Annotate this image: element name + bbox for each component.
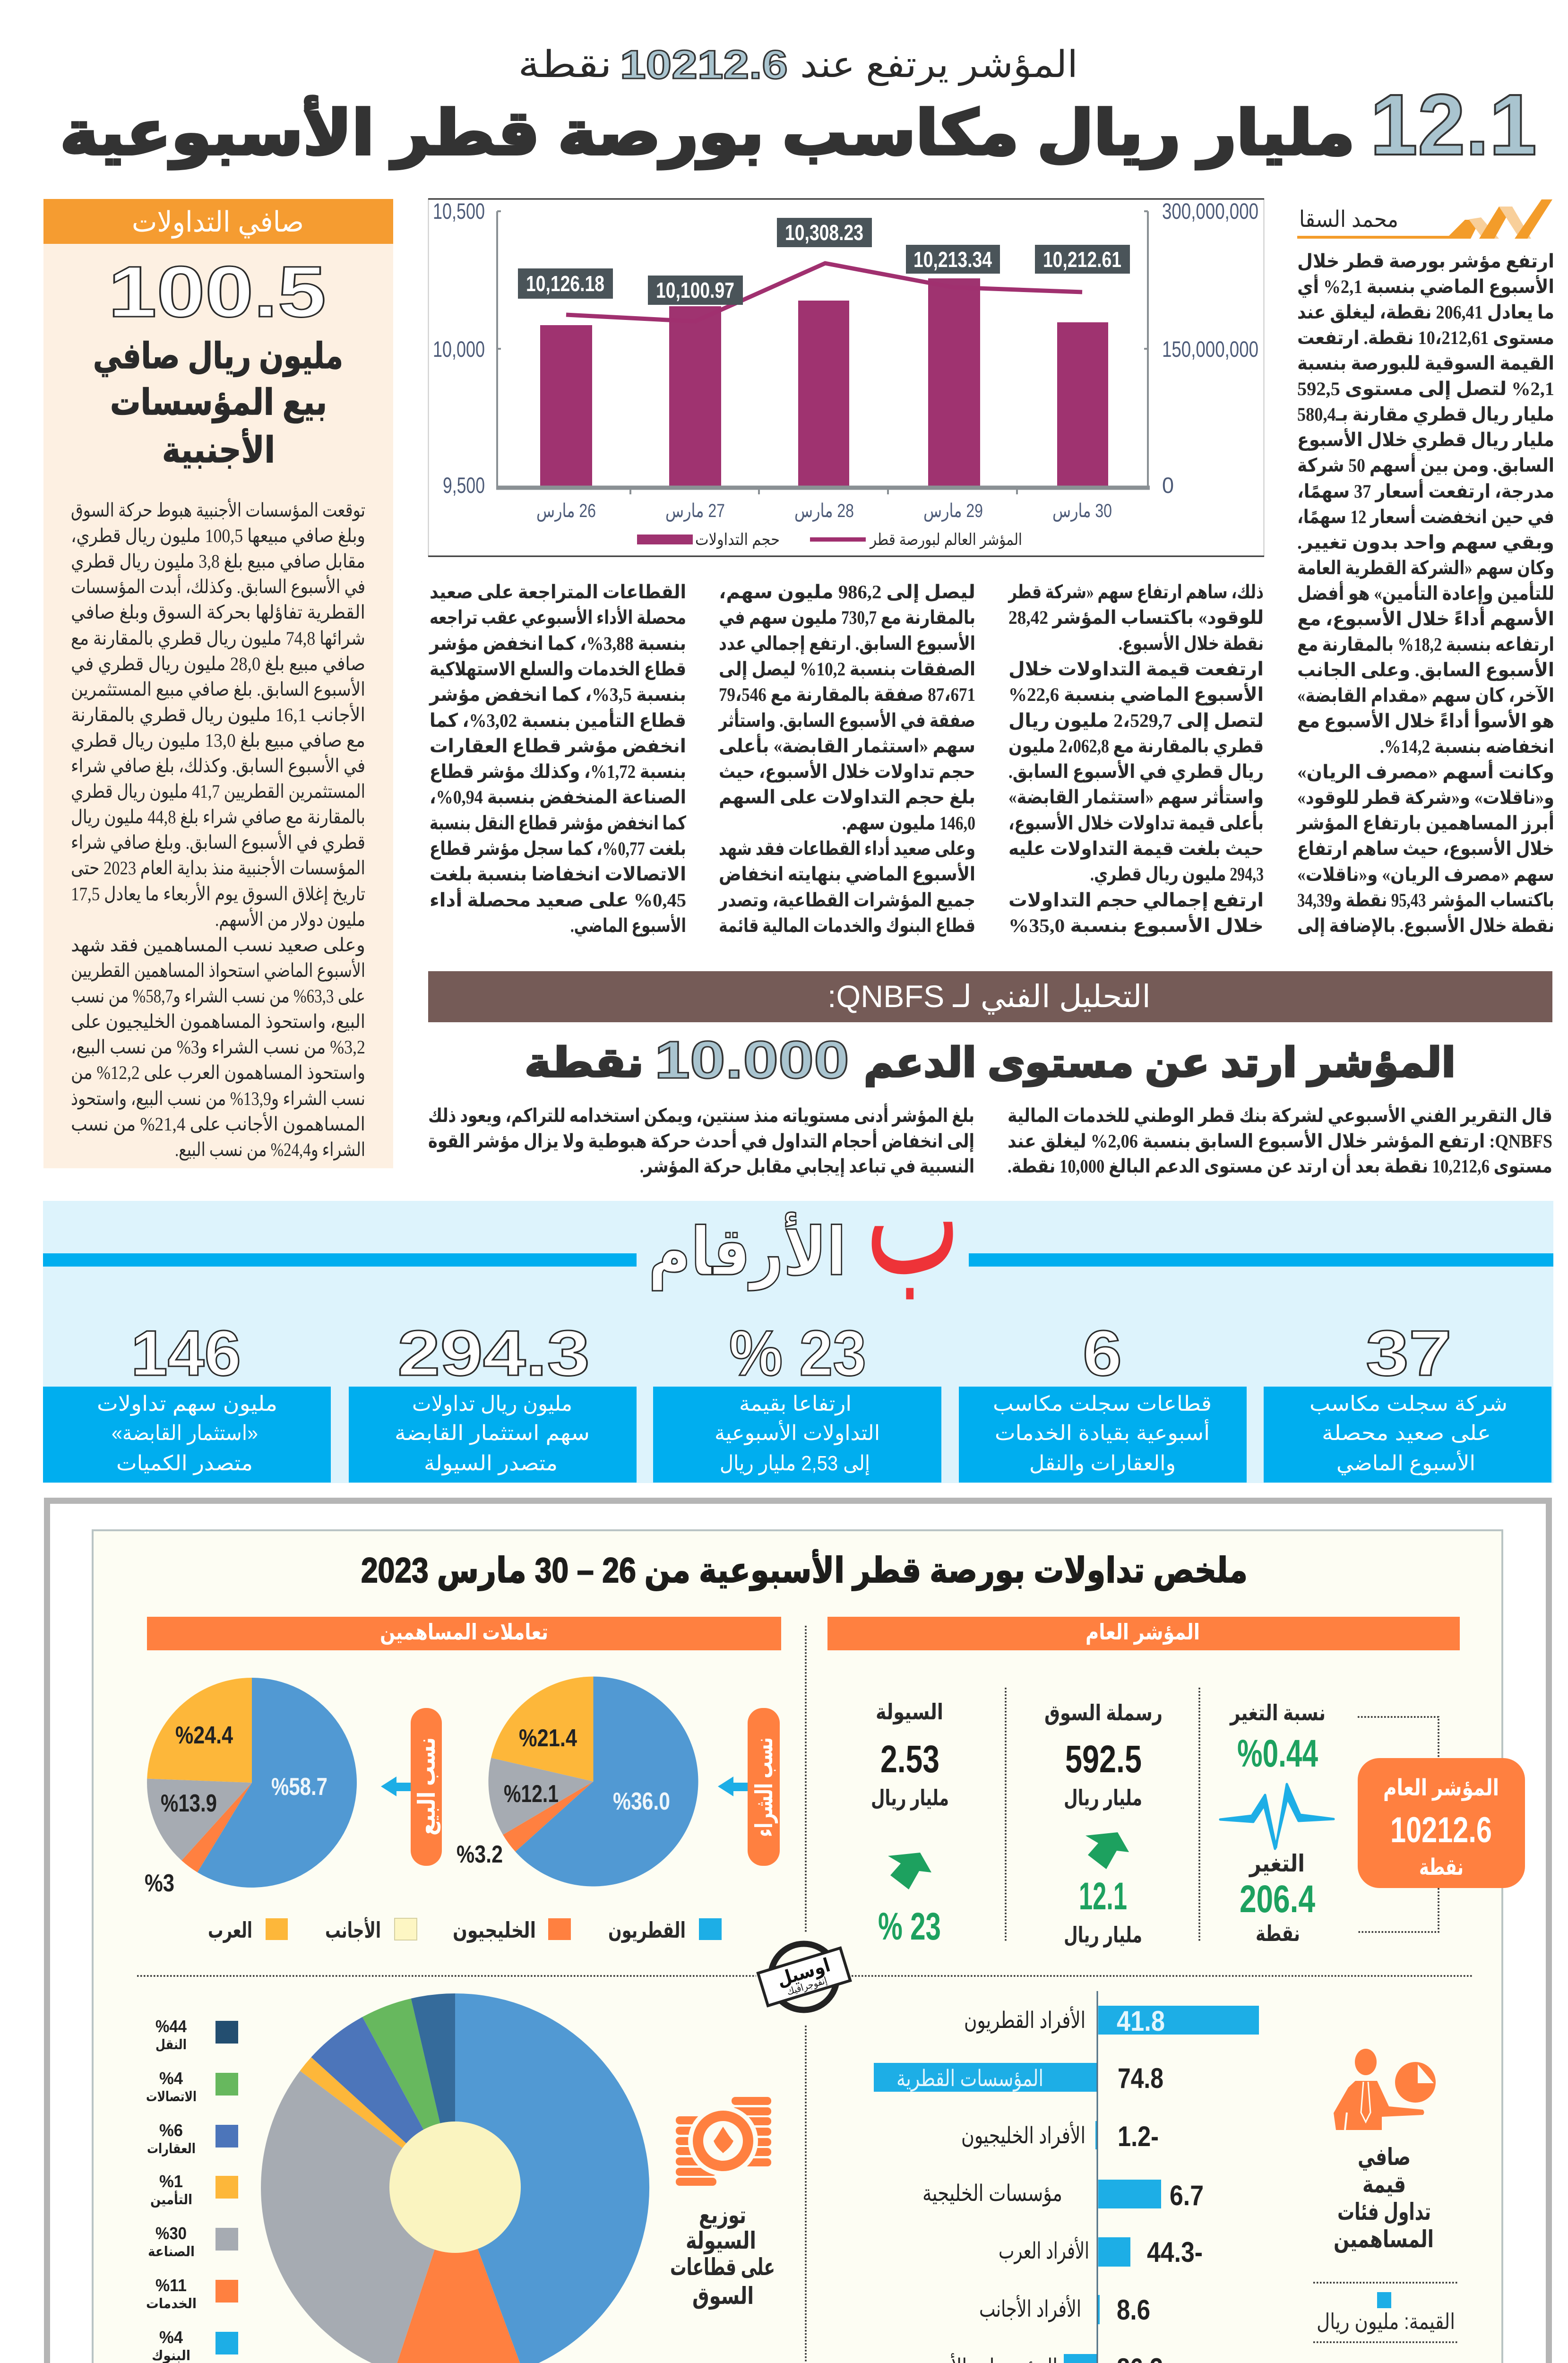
bar legend: value unit xyxy=(1317,2292,1455,2335)
bar chart: net trading by investor group xyxy=(874,1991,1259,2363)
technical analysis text left xyxy=(428,1103,974,1177)
stat: market cap: مليار ريال xyxy=(1064,1923,1142,1948)
chart: index and trading volume: 10,212.61 xyxy=(1043,247,1121,272)
article column 4: القطاعات المتراجعة على صعيد xyxy=(430,581,686,603)
pie chart: buy ratios: %21.4 xyxy=(519,1725,577,1752)
bar chart: net trading by investor group: 8.6 xyxy=(1117,2294,1150,2326)
bar chart: net trading by investor group: 74.8 xyxy=(1118,2062,1163,2094)
article column 4: الاتصالات انخفاضا بنسبة بلغت xyxy=(430,863,686,885)
subtitle xyxy=(518,43,1078,87)
pie chart: sell ratios: %24.4 xyxy=(175,1722,233,1749)
stat: liquidity: مليار ريال xyxy=(871,1785,949,1811)
pie legend xyxy=(208,1917,722,1943)
article column 3: 146,0 مليون سهم. xyxy=(842,812,975,834)
article column 3: صفقة في الأسبوع السابق. واستأثر xyxy=(718,708,975,732)
sidebar article text: وعلى صعيد نسب المساهمين فقد شهد xyxy=(71,934,365,956)
bar chart: net trading by investor group: الأفراد الخليجيون xyxy=(961,2121,1086,2149)
header: shareholder transactions xyxy=(147,1617,781,1650)
main headline xyxy=(60,76,1537,173)
article column 1: وبقي سهم واحد بدون تغيير. xyxy=(1297,532,1554,553)
sidebar article text: المساهمون الأجانب على 21,4% من نسب xyxy=(71,1112,365,1135)
sidebar article text: نسب الشراء و13,9% من نسب البيع، واستحوذ xyxy=(71,1088,365,1110)
article column 2: بأعلى قيمة تداولات خلال الأسبوع، xyxy=(1008,811,1264,834)
stat box: 23 percent: إلى 2,53 مليار ريال xyxy=(720,1452,870,1475)
sidebar article text: بالمقارنة مع صافي شراء بلغ 44,8 مليون ريال xyxy=(71,806,365,828)
donut legend: التأمين xyxy=(150,2191,192,2208)
main headline: 12.1 xyxy=(1370,76,1537,173)
sidebar article text: الأجانب 16,1 مليون ريال قطري بالمقارنة xyxy=(71,703,365,726)
pie legend: الخليجيون xyxy=(453,1918,536,1943)
date labels: 26 مارس xyxy=(536,500,596,522)
text: liquidity distribution: السوق xyxy=(692,2283,754,2310)
stat: liquidity: 23 % xyxy=(878,1905,941,1948)
section title: الأرقام xyxy=(648,1212,846,1291)
donut legend: %4 xyxy=(159,2328,183,2347)
text: net trading value: المساهمين xyxy=(1334,2226,1434,2253)
bar chart: net trading by investor group: 41.8 xyxy=(1117,2005,1165,2037)
axis labels: 300,000,000 xyxy=(1162,198,1258,224)
article column 1 xyxy=(1296,250,1554,937)
header: general index xyxy=(827,1617,1460,1650)
chart legend: حجم التداولات xyxy=(695,531,780,549)
article column 2: خلال الأسبوع بنسبة 35,0% xyxy=(1008,914,1264,937)
article column 3: قطاع البنوك والخدمات المالية قائمة xyxy=(719,915,975,937)
section title: ب xyxy=(865,1131,961,1306)
donut legend: %30 xyxy=(155,2224,187,2243)
article column 4: %0,45 على صعيد محصلة أداء xyxy=(430,888,686,911)
bar chart: net trading by investor group: -1.2 xyxy=(1118,2121,1159,2152)
sidebar article text: المؤسسات الأجنبية منذ بداية العام 2023 حتى xyxy=(71,856,365,879)
pie chart: sell ratios xyxy=(145,1678,357,1897)
article column 3: جميع المؤشرات القطاعية، وتصدر xyxy=(718,889,975,911)
pill: buy ratios with arrow xyxy=(718,1708,780,1866)
sidebar article text: تاريخ إغلاق السوق يوم الأربعاء ما يعادل 17,5 xyxy=(71,882,365,905)
date labels: 27 مارس xyxy=(665,500,725,522)
article column 3: ليصل إلى 986,2 مليون سهم، xyxy=(719,581,975,603)
sidebar article text: صافي مبيع بلغ 28,0 مليون ريال قطري في xyxy=(71,653,365,675)
sidebar article text: مقابل صافي مبيع بلغ 3,8 مليون ريال قطري xyxy=(71,551,365,572)
pie chart: sell ratios: %13.9 xyxy=(161,1790,217,1817)
pie chart: sell ratios: %58.7 xyxy=(271,1773,327,1801)
stat box: 23 percent: ارتفاعا بقيمة xyxy=(739,1392,852,1416)
header: shareholder transactions: تعاملات المساهمين xyxy=(380,1620,548,1645)
article column 4: بلغت 0,77%، كما سجل مؤشر قطاع xyxy=(430,838,686,860)
stat box: 294.3: مليون ريال تداولات xyxy=(412,1392,572,1416)
sidebar article text: توقعت المؤسسات الأجنبية هبوط حركة السوق xyxy=(71,498,365,521)
stat box: 6: قطاعات سجلت مكاسب xyxy=(993,1392,1212,1415)
technical analysis headline xyxy=(525,1030,1456,1089)
stat: liquidity xyxy=(871,1699,949,1948)
stat: change: %0.44 xyxy=(1237,1732,1318,1775)
sidebar article text: المستثمرين القطريين 41,7 مليون ريال قطري xyxy=(71,781,365,802)
stat box: 294.3: متصدر السيولة xyxy=(424,1452,558,1475)
article column 2: للوقود» باكتساب المؤشر 28,42 xyxy=(1008,607,1264,629)
article column 4: قطاع التأمين بنسبة 3,02%، كما xyxy=(430,708,686,732)
sidebar article text: في الأسبوع السابق. وكذلك، أبدت المؤسسات xyxy=(71,574,365,598)
big numbers: 294.3 xyxy=(397,1317,590,1389)
stat: liquidity: 2.53 xyxy=(880,1738,939,1781)
technical analysis headline: 10.000 xyxy=(655,1030,849,1089)
chart legend: المؤشر العالم لبورصة قطر xyxy=(869,531,1022,549)
article column 3: الأسبوع السابق. ارتفع إجمالي عدد xyxy=(719,631,975,655)
callout: general index value: المؤشر العام xyxy=(1383,1776,1499,1801)
pill: sell ratios with arrow xyxy=(381,1708,442,1866)
sidebar article text: الأسبوع الماضي استحواذ المساهمين القطريين xyxy=(71,958,365,982)
article column 4: محصلة الأداء الأسبوعي عقب تراجعه xyxy=(430,605,686,629)
article column 4: بنسبة 3,5%، كما انخفض مؤشر xyxy=(429,684,686,706)
donut legend: الاتصالات xyxy=(146,2089,197,2104)
pie chart: buy ratios: %3.2 xyxy=(457,1841,503,1868)
article column 1: الأسهم أداءً خلال الأسبوع، مع xyxy=(1297,606,1554,630)
article column 2: الأسبوع الماضي بنسبة 22,6% xyxy=(1008,682,1264,706)
sidebar article text: على 63,3% من نسب الشراء و58,7% من نسب xyxy=(71,985,365,1007)
stat box: 37 xyxy=(1264,1387,1551,1483)
article column 2: ارتفع إجمالي حجم التداولات xyxy=(1008,889,1264,911)
author byline with logo xyxy=(1297,199,1552,239)
pie chart: buy ratios: %36.0 xyxy=(613,1788,670,1815)
article column 3: الأسبوع الماضي بنهايته انخفاض xyxy=(719,862,975,885)
text: liquidity distribution xyxy=(670,2202,775,2310)
stamp: infographic: إنفوجرافيك xyxy=(785,1975,828,1998)
donut legend: الخدمات xyxy=(146,2296,197,2311)
sidebar big number: 100.5 xyxy=(108,251,326,332)
big numbers: 6 xyxy=(1083,1317,1122,1389)
sidebar headline xyxy=(93,336,343,470)
sidebar article text: %3,2 من نسب الشراء و3% من نسب البيع، xyxy=(71,1036,365,1058)
technical analysis text right: مستوى 10,212,6 نقطة بعد أن ارتد عن مستوى الدعم البالغ 10,000 نقطة. xyxy=(1008,1154,1552,1177)
donut legend: %1 xyxy=(159,2172,183,2191)
technical analysis text left: إلى انخفاض أحجام التداول في أحدث حركة هبوطية ولا يزال مؤشر القوة xyxy=(428,1129,974,1152)
pie chart: buy ratios: %12.1 xyxy=(504,1780,559,1808)
bar chart: net trading by investor group: مؤسسات الخليجية xyxy=(922,2181,1062,2207)
article column 1: مدرجة، ارتفعت أسعار 37 سهمًا، xyxy=(1297,479,1554,502)
date labels: 29 مارس xyxy=(923,500,983,522)
callout: general index value xyxy=(1358,1758,1525,1888)
subtitle: 10212.6 xyxy=(620,43,788,87)
sidebar article text: شرائها 74,8 مليون ريال قطري بالمقارنة مع xyxy=(71,628,365,649)
stat: market cap: 12.1 xyxy=(1079,1875,1127,1918)
big numbers: 37 xyxy=(1366,1317,1452,1389)
article column 4: بنسبة 3,88%، كما انخفض مؤشر xyxy=(429,633,686,655)
volume bars xyxy=(540,278,1108,488)
stat box: 146: «استثمار القابضة» xyxy=(112,1422,258,1445)
article column 3: حجم تداولات خلال الأسبوع، حيث xyxy=(719,759,975,783)
stat box: 294.3 xyxy=(349,1387,637,1483)
sidebar article text: واستحوذ المساهمون العرب على 12,2% من xyxy=(71,1062,365,1084)
article column 2: نقطة خلال الأسبوع. xyxy=(1119,631,1264,655)
article column 4: انخفض مؤشر قطاع العقارات xyxy=(430,735,686,757)
article column 4: قطاع الخدمات والسلع الاستهلاكية xyxy=(430,658,686,680)
banner: technical analysis: التحليل الفني لـ QNBFS: xyxy=(827,979,1151,1015)
article column 1: القيمة السوقية للبورصة بنسبة xyxy=(1297,353,1554,374)
article column 2: قطري بالمقارنة مع ⁦2،062,8⁩ مليون xyxy=(1008,735,1264,757)
technical analysis text right: QNBFS: ارتفع المؤشر خلال الأسبوع السابق بنسبة 2,06% ليغلق عند xyxy=(1008,1129,1552,1152)
article column 3 xyxy=(718,581,975,937)
chart legend xyxy=(637,531,1022,549)
pill: sell ratios with arrow: نسب البيع xyxy=(414,1737,441,1836)
stat box: 37: شركة سجلت مكاسب xyxy=(1310,1392,1508,1416)
stat: market cap: رسملة السوق xyxy=(1044,1700,1163,1725)
stamp: infographic xyxy=(758,1944,850,2010)
icon: pulse xyxy=(1220,1784,1334,1849)
stat box: 37: الأسبوع الماضي xyxy=(1336,1450,1475,1475)
callout: general index value: نقطة xyxy=(1419,1855,1464,1880)
chart axes xyxy=(497,211,1148,494)
stat: market cap: مليار ريال xyxy=(1064,1785,1142,1811)
sidebar article text: البيع، واستحوذ المساهمون الخليجيون على xyxy=(71,1011,365,1033)
donut legend: الصناعة xyxy=(148,2244,195,2260)
text: liquidity distribution: توزيع xyxy=(699,2202,746,2229)
article column 4: بنسبة 1,72%، وكذلك مؤشر قطاع xyxy=(430,761,686,783)
article column 1: %2,1 لتصل إلى مستوى 592,5 xyxy=(1297,378,1554,400)
sidebar headline: بيع المؤسسات xyxy=(110,382,327,423)
text: net trading value: صافي xyxy=(1358,2144,1411,2171)
big numbers: 23 % xyxy=(729,1317,866,1389)
sidebar article text: قطري في الأسبوع السابق. وبلغ صافي شراء xyxy=(71,830,365,854)
index line xyxy=(566,263,1082,321)
article column 2: ريال قطري في الأسبوع السابق. xyxy=(1008,759,1264,783)
subtitle: المؤشر يرتفع عند xyxy=(800,43,1078,86)
text: liquidity distribution: على قطاعات xyxy=(670,2254,775,2280)
article column 2: واستأثر سهم «استثمار القابضة» xyxy=(1008,785,1264,808)
bar chart: net trading by investor group: الأفراد الأجانب xyxy=(979,2294,1081,2322)
stat: change xyxy=(1220,1700,1334,1946)
text: liquidity distribution: السيولة xyxy=(686,2227,756,2255)
stat box: 6: أسبوعية بقيادة الخدمات xyxy=(995,1419,1210,1445)
author byline with logo: محمد السقا xyxy=(1299,207,1398,232)
stat: change: التغير xyxy=(1248,1850,1305,1878)
stat box: 6: والعقارات والنقل xyxy=(1029,1452,1176,1475)
bar chart: net trading by investor group: -44.3 xyxy=(1147,2236,1203,2268)
article column 3: الصفقات بنسبة 10,2% ليصل إلى xyxy=(719,658,975,680)
article column 3: بلغ حجم التداولات على السهم xyxy=(719,786,975,808)
article column 1: ما يعادل 206,41 نقطة، ليغلق عند xyxy=(1297,302,1554,323)
chart: index and trading volume: 10,126.18 xyxy=(526,271,604,296)
donut legend: العقارات xyxy=(147,2141,196,2156)
date labels: 30 مارس xyxy=(1052,500,1112,522)
stat box: 23 percent xyxy=(653,1387,941,1483)
text: net trading value: قيمة xyxy=(1362,2171,1406,2198)
bar chart: net trading by investor group: الأفراد القطريون xyxy=(964,2006,1086,2034)
article column 1: ارتفع مؤشر بورصة قطر خلال xyxy=(1297,250,1554,272)
donut legend: النقل xyxy=(155,2037,187,2053)
pie legend: العرب xyxy=(208,1918,252,1943)
sidebar article text: وبلغ صافي مبيعها 100,5 مليون ريال قطري، xyxy=(71,525,365,547)
article column 4: الأسبوع الماضي. xyxy=(570,914,686,937)
stat box: 294.3: سهم استثمار القابضة xyxy=(395,1422,590,1445)
stat box: 146 xyxy=(43,1387,331,1483)
article column 3: سهم «استثمار القابضة» بأعلى xyxy=(719,733,975,757)
article column 2: ذلك، ساهم ارتفاع سهم «شركة قطر xyxy=(1008,581,1264,603)
banner: technical analysis xyxy=(428,971,1552,1022)
donut legend: %4 xyxy=(159,2069,183,2088)
chart: index and trading volume: 10,213.34 xyxy=(913,247,992,272)
icon: up arrow xyxy=(1086,1832,1129,1869)
article column 3: بالمقارنة مع 730,7 مليون سهم في xyxy=(719,607,975,629)
article column 1: الأسبوع السابق. وعلى الجانب xyxy=(1297,658,1554,681)
article column 1: هو الأسوأ أداءً خلال الأسبوع مع xyxy=(1297,708,1554,732)
bar chart: net trading by investor group: الأفراد العرب xyxy=(999,2236,1089,2264)
text: net trading value: تداول فئات xyxy=(1337,2199,1431,2226)
date labels: 28 مارس xyxy=(794,500,854,522)
main headline: مليار ريال مكاسب بورصة قطر الأسبوعية xyxy=(60,96,1355,169)
icon: up arrow xyxy=(888,1853,931,1889)
bar legend: value unit: القيمة: مليون ريال xyxy=(1317,2309,1455,2335)
summary title: ملخص تداولات بورصة قطر الأسبوعية من 26 – 30 مارس 2023 xyxy=(361,1549,1248,1591)
article column 1: مستوى ⁦10،212,61⁩ نقطة. ارتفعت xyxy=(1297,327,1554,349)
pie chart: sell ratios: %3 xyxy=(145,1870,174,1897)
technical analysis text left: النسبية في تباعد إيجابي مقابل حركة المؤشر. xyxy=(640,1156,974,1177)
sidebar article text xyxy=(71,498,365,1161)
article column 2: ارتفعت قيمة التداولات خلال xyxy=(1008,658,1264,680)
sidebar article text: الشراء و24,4% من نسب البيع. xyxy=(175,1139,365,1161)
section title xyxy=(648,1131,961,1306)
value labels xyxy=(518,218,1130,305)
stat box: 146: متصدر الكميات xyxy=(116,1452,253,1475)
article column 1: الأسبوع الماضي بنسبة 2,1% أي xyxy=(1297,274,1554,298)
article column 3: ⁦87،671⁩ صفقة بالمقارنة مع ⁦79،546⁩ xyxy=(719,684,975,706)
donut chart: liquidity by sector xyxy=(261,1993,649,2363)
pie legend: القطريون xyxy=(608,1918,686,1943)
donut legend: %6 xyxy=(159,2121,183,2140)
article column 1: ارتفاعه بنسبة 18,2% بالمقارنة مع xyxy=(1297,634,1554,655)
donut legend xyxy=(146,2017,238,2363)
article column 4 xyxy=(429,581,687,937)
stat box: 146: مليون سهم تداولات xyxy=(97,1392,277,1416)
chart: index and trading volume xyxy=(428,198,1264,556)
stamp: infographic: اوسيل xyxy=(775,1955,833,1991)
sidebar article text: في الأسبوع السابق. وكذلك، بلغ صافي شراء xyxy=(71,754,365,777)
stat box: 37: على صعيد محصلة xyxy=(1322,1422,1491,1445)
article column 2 xyxy=(1008,581,1264,937)
axis labels: 9,500 xyxy=(443,473,485,498)
chart: index and trading volume: 10,100.97 xyxy=(656,278,734,302)
panel: weekly trading summary xyxy=(47,1501,1549,2363)
sidebar article text: الأسبوع السابق. بلغ صافي مبيع المستثمرين xyxy=(71,677,365,700)
axis labels: 10,500 xyxy=(433,198,485,224)
big numbers: 146 xyxy=(131,1317,241,1389)
axis labels xyxy=(433,198,1258,498)
sidebar header: صافي التداولات xyxy=(132,206,304,239)
technical analysis headline: المؤشر ارتد عن مستوى الدعم xyxy=(864,1040,1456,1087)
stat: market cap: 592.5 xyxy=(1065,1738,1142,1781)
date labels xyxy=(536,500,1112,522)
article column 4: كما انخفض مؤشر قطاع النقل بنسبة xyxy=(430,812,687,834)
stat: liquidity: السيولة xyxy=(876,1699,943,1725)
technical analysis text right xyxy=(1008,1104,1552,1177)
article column 3: وعلى صعيد أداء القطاعات فقد شهد xyxy=(719,836,975,860)
bar chart: net trading by investor group: 6.7 xyxy=(1170,2180,1204,2211)
panel: by the numbers xyxy=(43,1131,1553,1483)
icon: coins xyxy=(676,2097,771,2186)
chart: index and trading volume: 10,308.23 xyxy=(785,220,863,245)
article column 1: انخفاضه بنسبة 14,2%. xyxy=(1380,736,1554,757)
sidebar article text: مع صافي مبيع بلغ 13,0 مليون ريال قطري xyxy=(71,730,365,751)
callout: general index value: 10212.6 xyxy=(1390,1810,1492,1850)
article column 2: حيث بلغت قيمة التداولات عليه xyxy=(1008,838,1264,860)
text: net trading value xyxy=(1334,2144,1434,2253)
big numbers xyxy=(131,1317,1452,1389)
sidebar headline: مليون ريال صافي xyxy=(93,336,343,377)
stat box: 6 xyxy=(959,1387,1247,1483)
technical analysis headline: نقطة xyxy=(525,1040,644,1086)
article column 2: 294,3 مليون ريال قطري. xyxy=(1090,863,1264,885)
pie legend: الأجانب xyxy=(325,1917,381,1942)
axis labels: 10,000 xyxy=(433,336,485,362)
donut legend: %11 xyxy=(155,2276,187,2295)
stat: market cap xyxy=(1044,1700,1163,1948)
bar chart: net trading by investor group: المؤسسات القطرية xyxy=(896,2066,1043,2092)
sidebar article text: القطرية تفاؤلها بحركة السوق وبلغ صافي xyxy=(71,602,365,623)
pill: buy ratios with arrow: نسب الشراء xyxy=(751,1737,778,1837)
donut legend: %44 xyxy=(155,2017,187,2036)
sidebar headline: الأجنبية xyxy=(162,428,275,470)
stat: change: 206.4 xyxy=(1240,1878,1315,1921)
technical analysis text left: بلغ المؤشر أدنى مستوياته منذ سنتين، ويمكن استخدامه للتراكم، ويعود ذلك xyxy=(428,1103,974,1127)
article column 4: الصناعة المنخفض بنسبة 0,94%، xyxy=(430,786,686,808)
subtitle: نقطة xyxy=(518,43,612,85)
stat: change: نسبة التغير xyxy=(1229,1700,1326,1725)
panel: net trading sidebar xyxy=(43,199,393,1168)
icon: presenter with pie xyxy=(1334,2049,1436,2130)
sidebar article text: مليون دولار من الأسهم. xyxy=(215,907,365,931)
axis labels: 150,000,000 xyxy=(1162,336,1258,362)
article column 1: وكانت أسهم «مصرف الريان» xyxy=(1297,759,1554,783)
pie chart: buy ratios xyxy=(457,1677,698,1887)
axis labels: 0 xyxy=(1162,473,1174,498)
header: general index: المؤشر العام xyxy=(1086,1620,1200,1645)
stat box: 23 percent: التداولات الأسبوعية xyxy=(715,1420,880,1445)
stat: change: نقطة xyxy=(1256,1921,1300,1946)
article column 2: لتصل إلى ⁦2،529,7⁩ مليون ريال xyxy=(1008,710,1264,732)
